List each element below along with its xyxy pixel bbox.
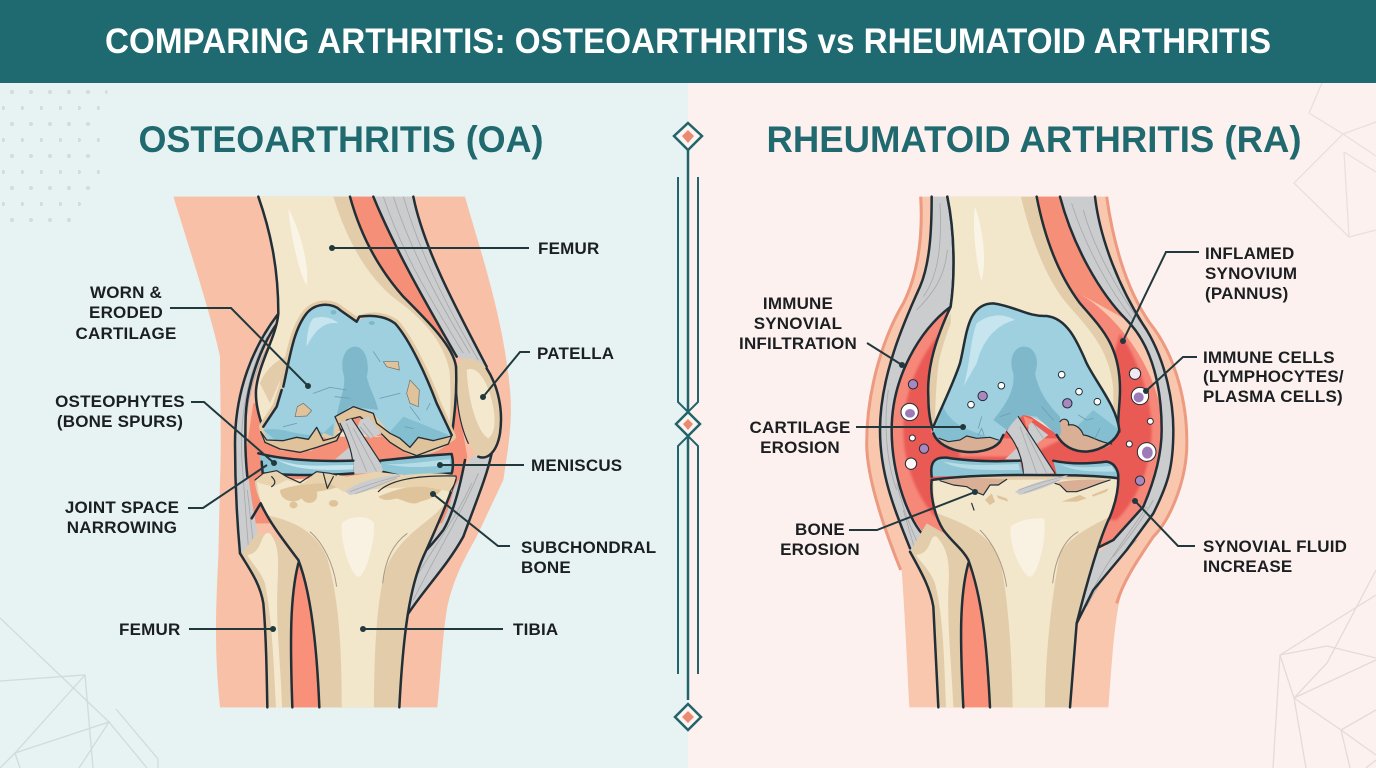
labels: osteoarthritis leader lines bbox=[170, 245, 530, 632]
immune cells bbox=[901, 368, 1156, 485]
title banner bbox=[0, 0, 1376, 83]
label: inflamed synovium: SYNOVIUM bbox=[1205, 264, 1297, 283]
tibial plateau jagged edge bbox=[255, 471, 456, 492]
heading: osteoarthritis: OSTEOARTHRITIS (OA) bbox=[138, 119, 544, 160]
decorative polygon lines bottom left bbox=[0, 618, 158, 768]
decorative polygon lines bottom right bbox=[1273, 570, 1376, 768]
label: patella: PATELLA bbox=[537, 344, 614, 363]
label: osteophytes: OSTEOPHYTES bbox=[55, 392, 185, 411]
label: cartilage erosion: CARTILAGE bbox=[750, 418, 850, 437]
muscle strip lower bbox=[291, 563, 319, 707]
title banner: COMPARING ARTHRITIS: OSTEOARTHRITIS vs RHEUMATOID ARTHRITIS bbox=[105, 22, 1271, 61]
subchondral bone speckle bbox=[280, 478, 445, 508]
label: worn cartilage: CARTILAGE bbox=[76, 324, 176, 343]
fibula bbox=[242, 533, 298, 707]
label: immune cells: PLASMA CELLS) bbox=[1203, 387, 1343, 406]
cartilage bbox=[933, 303, 1119, 452]
femur bbox=[928, 197, 1120, 433]
label: worn cartilage: WORN & bbox=[90, 283, 162, 302]
muscle strip lower bbox=[961, 563, 990, 707]
meniscus bbox=[931, 458, 1023, 477]
label: femur upper: FEMUR bbox=[538, 239, 599, 258]
decorative polygon lines top right bbox=[1294, 83, 1376, 237]
muscle and synovial space bbox=[245, 397, 467, 523]
meniscus bbox=[260, 455, 353, 475]
heading: rheumatoid arthritis: RHEUMATOID ARTHRITIS (RA) bbox=[766, 119, 1302, 160]
muscle strip upper right bbox=[1037, 197, 1127, 320]
panel background: rheumatoid arthritis side bbox=[688, 83, 1376, 768]
diagram: rheumatoid arthritis knee joint bbox=[867, 197, 1187, 707]
label: immune synovial infiltration: SYNOVIAL bbox=[754, 314, 842, 333]
ligaments bbox=[357, 417, 382, 438]
skin bbox=[173, 197, 511, 707]
tibia bbox=[932, 475, 1118, 707]
cartilage erosion bbox=[939, 419, 1112, 452]
tendon left bbox=[880, 197, 954, 553]
skin bbox=[867, 197, 1187, 707]
diagram: osteoarthritis knee joint bbox=[173, 197, 511, 707]
labels: rheumatoid arthritis leader lines bbox=[849, 252, 1199, 546]
bone erosion bbox=[940, 478, 1110, 495]
tendon upper right bbox=[373, 197, 487, 367]
label: immune cells: (LYMPHOCYTES/ bbox=[1203, 367, 1344, 386]
label: inflamed synovium: INFLAMED bbox=[1205, 244, 1294, 263]
label: immune cells: IMMUNE CELLS bbox=[1203, 348, 1335, 367]
cartilage cracks bbox=[295, 362, 419, 417]
label: bone erosion: EROSION bbox=[780, 540, 860, 559]
label: synovial fluid increase: INCREASE bbox=[1203, 557, 1292, 576]
label: subchondral bone: SUBCHONDRAL bbox=[521, 538, 656, 557]
label: immune synovial infiltration: INFILTRATION bbox=[739, 334, 857, 353]
synovium inflamed bbox=[892, 288, 1163, 545]
label: inflamed synovium: (PANNUS) bbox=[1205, 284, 1288, 303]
eroded edge of cartilage bbox=[261, 407, 452, 456]
label: synovial fluid increase: SYNOVIAL FLUID bbox=[1203, 537, 1347, 556]
label: cartilage erosion: EROSION bbox=[760, 438, 840, 457]
label: tibia: TIBIA bbox=[513, 620, 558, 639]
label: immune synovial infiltration: IMMUNE bbox=[763, 294, 833, 313]
tendon lower right bbox=[408, 453, 492, 613]
label: joint space narrowing: NARROWING bbox=[67, 518, 177, 537]
patella bbox=[456, 359, 501, 457]
label: worn cartilage: ERODED bbox=[89, 303, 163, 322]
tendon right bbox=[1060, 197, 1173, 623]
ligaments bbox=[1028, 420, 1048, 444]
label: joint space narrowing: JOINT SPACE bbox=[65, 498, 179, 517]
panel background: osteoarthritis side bbox=[0, 83, 688, 768]
label: osteophytes: (BONE SPURS) bbox=[57, 412, 183, 431]
label: femur lower: FEMUR bbox=[119, 620, 180, 639]
decorative dot texture bbox=[2, 90, 108, 222]
label: subchondral bone: BONE bbox=[521, 558, 571, 577]
label: bone erosion: BONE bbox=[795, 520, 845, 539]
fibula bbox=[910, 523, 968, 707]
label: meniscus: MENISCUS bbox=[531, 456, 622, 475]
tibia bbox=[255, 475, 455, 707]
tendon left bbox=[235, 315, 277, 553]
worn cartilage bbox=[263, 305, 452, 453]
femur bbox=[256, 197, 456, 437]
center divider bbox=[674, 123, 702, 730]
